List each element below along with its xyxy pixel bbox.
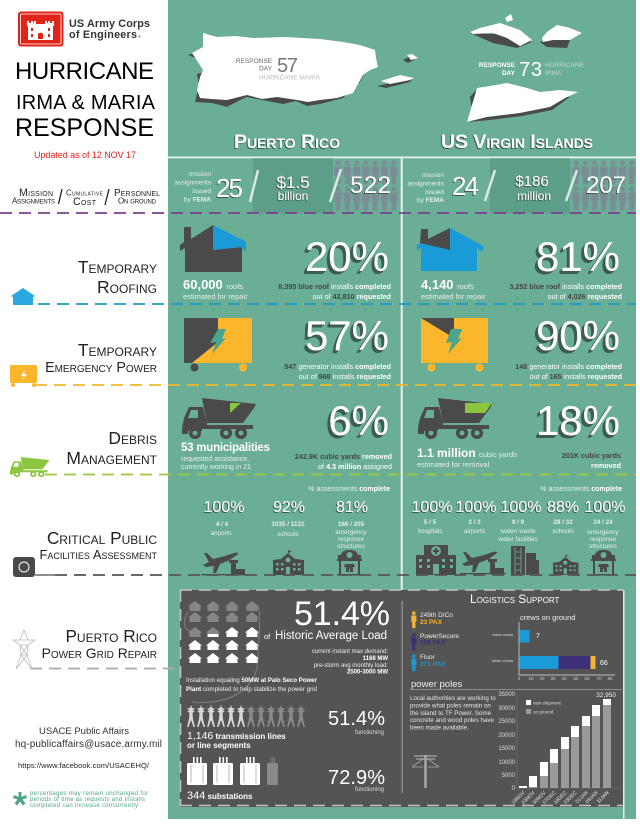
stats: Puerto Rico: $1.5 xyxy=(276,173,310,192)
stats: Puerto Rico: assignments xyxy=(174,180,212,186)
text: cubic yards estimated: 1.1 million cubic yards xyxy=(417,446,517,460)
bar chart: crews on ground: 30 xyxy=(550,676,556,681)
column headings: Assignments xyxy=(12,196,55,206)
stats: Puerto Rico xyxy=(174,169,391,204)
update date: Updated as of 12 NOV 17 xyxy=(34,150,136,160)
icon: debris truck, Puerto Rico xyxy=(182,398,256,437)
bar chart: power poles: 08JAN xyxy=(585,790,600,805)
footnote: completed can increase concurrently xyxy=(30,803,138,809)
legend: logistics personnel: Fluor xyxy=(420,654,436,661)
stats: US Virgin Islands: issued xyxy=(425,189,444,196)
bar chart: power poles: 0 xyxy=(512,786,516,792)
text: roof installs, Puerto Rico xyxy=(278,282,391,301)
response day label: RESPONSE xyxy=(479,62,516,69)
text: debris removed, Puerto Rico: of 4.3 million assigned xyxy=(318,462,392,471)
text: roof installs, Virgin Islands xyxy=(509,282,622,301)
stat: historic average load: 51.4% xyxy=(294,595,390,633)
text: transmission lines: 1,146 transmission lines xyxy=(187,730,286,742)
bar chart: power poles: on ground xyxy=(533,710,554,714)
stats: Puerto Rico: 25 xyxy=(216,173,243,203)
stats: US Virgin Islands: $186 xyxy=(515,173,549,190)
stat: 81 percent: 81% xyxy=(536,233,620,280)
text: debris removed, Virgin Islands xyxy=(562,451,621,470)
heading: power poles: power poles xyxy=(411,679,462,690)
column headings: Personnel xyxy=(114,188,160,199)
row: Debris Management: Debris xyxy=(108,428,157,448)
contact details: https://www.facebook.com/USACEHQ/ xyxy=(18,761,150,770)
bar chart: crews on ground: 70 xyxy=(596,676,602,681)
text: generator installs, Virgin Islands: out of 165 installs requested xyxy=(530,372,622,381)
legend: logistics personnel: PowerSecure xyxy=(420,633,459,640)
icon row: transmission towers xyxy=(187,705,305,727)
center divider xyxy=(401,158,403,590)
assessments: Puerto Rico: airports xyxy=(210,530,232,537)
assessments: Virgin Islands: % assessments complete xyxy=(540,486,622,493)
bar chart: crews on ground xyxy=(492,613,615,681)
text: roofs estimated, Puerto Rico: estimated for repair xyxy=(183,292,248,301)
assessments: Puerto Rico: emergency xyxy=(335,529,367,536)
legend: logistics personnel xyxy=(411,611,459,671)
assessments: Virgin Islands: response xyxy=(590,536,616,543)
assessments: Virgin Islands: 100% xyxy=(412,499,452,516)
assessments: Virgin Islands: 88% xyxy=(547,499,579,516)
heading: US Virgin Islands: US Virgin Islands xyxy=(441,131,593,153)
response day label: HURRICANE xyxy=(545,62,585,69)
dashed row separators xyxy=(0,213,636,668)
bar chart: power poles: 01JAN xyxy=(575,790,590,805)
bar chart: power poles: 23DEC xyxy=(563,790,579,806)
text: roofs estimated, Puerto Rico xyxy=(183,277,248,301)
stat: 57 percent: 57% xyxy=(305,312,389,359)
response day label xyxy=(479,59,585,81)
text: substations: 344 substations xyxy=(187,790,253,802)
response day label: DAY xyxy=(502,70,516,77)
map: Puerto Rico xyxy=(188,33,418,107)
bar chart: crews on ground: 7 xyxy=(536,633,540,640)
text: demand figures: pre-storm avg monthly load: xyxy=(314,663,388,669)
bar chart: power poles: 16DEC xyxy=(553,790,569,806)
text: municipalities xyxy=(181,442,270,471)
stat: 6 percent: 6% xyxy=(328,397,389,444)
text: Palo Seco installation xyxy=(186,677,318,693)
bar chart: power poles: 10000 xyxy=(498,760,516,766)
row: Temporary Roofing: Temporary xyxy=(78,257,157,277)
text: power poles explanation: the island to TF Power. Some xyxy=(410,710,492,717)
assessments: Puerto Rico: structures xyxy=(337,543,365,550)
stat: historic average load: of xyxy=(264,632,271,641)
bar chart: power poles: 23NOV xyxy=(521,790,537,806)
icon: house with partial blue roof, Puerto Rico xyxy=(180,225,246,272)
text: power poles explanation: been made available. xyxy=(410,724,469,732)
bar chart: crews on ground: crews on ground xyxy=(520,613,575,622)
text: cubic yards estimated: estimated for removal xyxy=(417,460,489,469)
assessments: Virgin Islands: 24 / 24 xyxy=(593,519,613,526)
text: transmission lines xyxy=(187,730,286,750)
bar chart: crews on ground: 80 xyxy=(607,676,613,681)
column headings: On ground xyxy=(118,196,157,206)
footnote: percentages may remain unchanged for xyxy=(30,791,148,797)
column headings xyxy=(12,187,160,208)
assessments: Puerto Rico: 166 / 205 xyxy=(338,521,365,528)
stats: Puerto Rico: billion xyxy=(278,189,308,203)
row: Temporary Emergency Power: Emergency Power xyxy=(45,360,157,376)
assessments: Virgin Islands: 100% xyxy=(585,499,625,516)
stat: 18 percent: 18% xyxy=(536,397,620,444)
panel: green background xyxy=(168,0,636,819)
row: Temporary Roofing: Roofing xyxy=(97,277,157,297)
footnote: periods of time as requests and installs xyxy=(30,797,145,803)
assessments: Puerto Rico: 1035 / 1131 xyxy=(272,521,305,528)
assessments: Puerto Rico: response xyxy=(338,536,364,543)
stats: US Virgin Islands: 24 xyxy=(452,171,479,201)
row: Debris Management xyxy=(10,397,621,476)
bar chart: crews on ground: 40 xyxy=(561,676,567,681)
icon: small generator xyxy=(10,365,37,387)
panel: header xyxy=(12,12,160,208)
text: debris removed, Puerto Rico xyxy=(295,452,392,471)
text: debris removed, Puerto Rico: 242.9K cubic yards removed xyxy=(295,452,392,461)
logo: US Army Corps of Engineers: of Engineers xyxy=(69,29,137,41)
icon: small green truck xyxy=(10,457,49,476)
logo: US Army Corps of Engineers xyxy=(18,12,150,46)
legend: logistics personnel: 258 PAX xyxy=(420,640,446,646)
response day label: 73 xyxy=(519,59,542,81)
row: Temporary Roofing xyxy=(11,225,622,305)
icon: debris truck, Virgin Islands xyxy=(418,398,492,437)
column headings: Mission xyxy=(19,187,53,199)
text: municipalities: 53 municipalities xyxy=(181,442,270,454)
bar chart: crews on ground: 50 xyxy=(573,676,579,681)
row: Temporary Emergency Power: Temporary xyxy=(78,340,157,360)
response day label: RESPONSE xyxy=(236,58,273,65)
assessments: Puerto Rico: 4 / 4 xyxy=(216,521,229,528)
text: generator installs, Puerto Rico: out of 968 installs requested xyxy=(299,372,391,381)
icon: house with mostly blue roof, Virgin Islands xyxy=(417,228,483,271)
assessments: Virgin Islands: 5 / 5 xyxy=(424,519,437,526)
response day label: HURRICANE MARIA xyxy=(259,74,321,82)
text: demand figures: 1168 MW xyxy=(363,656,388,662)
footnote xyxy=(13,791,148,809)
logo: US Army Corps of Engineers: US Army Corps xyxy=(69,18,150,30)
assessments: Virgin Islands: schools xyxy=(552,528,574,535)
bar chart: power poles: 07DEC xyxy=(542,790,558,806)
stat: 90 percent: 90% xyxy=(536,312,620,359)
text: roof installs, Puerto Rico: out of 42,810 requested xyxy=(313,292,391,301)
bar chart: crews on ground: trans crews xyxy=(493,632,513,637)
bar chart: power poles: 19NOV xyxy=(511,790,527,806)
bar chart: power poles: 20000 xyxy=(498,733,516,739)
text: power poles explanation xyxy=(410,695,496,732)
assessments: Puerto Rico: % assessments complete xyxy=(308,486,390,493)
text: demand figures xyxy=(312,649,388,676)
assessments: Virgin Islands: hospitals xyxy=(418,528,442,535)
icon: transmission tower xyxy=(13,630,35,669)
legend: logistics personnel: 249th D/Co xyxy=(420,612,453,619)
stats: Puerto Rico: 522 xyxy=(350,172,391,199)
bar chart: crews on ground: distro crews xyxy=(492,658,513,663)
text: debris removed, Virgin Islands: 201K cubic yards xyxy=(562,451,621,460)
row: Temporary Emergency Power xyxy=(10,312,622,387)
assessments: Puerto Rico: schools xyxy=(277,531,299,538)
contact details: USACE Public Affairs xyxy=(39,726,129,737)
stat: historic average load xyxy=(264,595,390,642)
bar chart: power poles: 35000 xyxy=(498,692,516,698)
bar chart: power poles: 32,950 xyxy=(596,692,616,699)
bar chart: power poles: 30NOV xyxy=(532,790,548,806)
text: municipalities: requested assistance, xyxy=(181,456,249,463)
panel: summary stats xyxy=(168,156,636,213)
icon: generator, Virgin Islands xyxy=(421,318,488,372)
bar chart: power poles: new shipment xyxy=(533,700,562,706)
response day label: DAY xyxy=(259,66,273,72)
bar chart: power poles: 5000 xyxy=(502,773,516,779)
assessments: Virgin Islands: structures xyxy=(589,543,617,550)
bar chart: crews on ground: 60 xyxy=(584,676,590,681)
response day label: 57 xyxy=(277,55,298,77)
text: generator installs, Puerto Rico xyxy=(284,362,391,381)
row: Critical Public Facilities Assessment xyxy=(13,486,625,577)
assessments: Virgin Islands: 100% xyxy=(501,499,541,516)
text: roofs estimated, Virgin Islands xyxy=(421,277,486,301)
assessments: Virgin Islands: water facilities xyxy=(497,536,538,543)
stat: substations functioning: functioning xyxy=(355,787,384,793)
text: generator installs, Virgin Islands: 148 generator installs completed xyxy=(515,362,622,371)
bar chart: crews on ground: 10 xyxy=(528,676,534,681)
icon: blue house xyxy=(11,288,35,305)
text: generator installs, Puerto Rico: 547 generator installs completed xyxy=(284,362,391,371)
heading: Puerto Rico: Puerto Rico xyxy=(234,131,340,153)
stat: historic average load: Historic Average Load xyxy=(275,630,387,642)
stats: US Virgin Islands: mission xyxy=(422,172,444,179)
response day label: IRMA xyxy=(545,70,562,77)
row: Debris Management: Management xyxy=(66,448,158,468)
text: Palo Seco installation: Installation equaling 50MW at Palo Seco Power xyxy=(186,677,318,684)
stats: Puerto Rico: issued xyxy=(192,188,211,195)
heading: logistics support: Logistics Support xyxy=(470,592,560,606)
title: IRMA & MARIA xyxy=(16,92,156,114)
text: demand figures: current instant max demand: xyxy=(312,649,388,655)
icon: generator, Puerto Rico xyxy=(184,318,252,372)
assessments: Puerto Rico: 100% xyxy=(204,499,244,516)
legend: logistics personnel: 271 PAX xyxy=(420,661,446,668)
column headings: Cumulative xyxy=(66,188,104,198)
row: Critical Public Facilities Assessment: Critical Public xyxy=(47,528,157,548)
stat: transmission functioning: 51.4% xyxy=(328,708,385,730)
contact details: hq-publicaffairs@usace.army.mil xyxy=(15,739,162,750)
row label: Puerto Rico Power Grid Repair xyxy=(42,626,157,661)
icon: power pole xyxy=(412,755,439,788)
response day label xyxy=(236,55,321,82)
bar chart: power poles: 25000 xyxy=(498,719,516,725)
stat: 20 percent: 20% xyxy=(305,233,389,280)
text: power poles explanation: concrete and wood poles have xyxy=(410,717,494,724)
title xyxy=(15,58,156,142)
bar chart: power poles: 15000 xyxy=(498,746,516,752)
bar chart: crews on ground: 66 xyxy=(600,660,608,667)
icon: tape measure xyxy=(13,557,55,577)
icon row: substations xyxy=(187,757,278,785)
stats: US Virgin Islands xyxy=(408,170,626,204)
map: US Virgin Islands xyxy=(467,14,585,122)
icons: Virgin Islands facilities xyxy=(416,545,616,576)
assessments: Virgin Islands xyxy=(412,486,625,550)
text: demand figures: 2500-3000 MW xyxy=(347,670,388,676)
text: roof installs, Virgin Islands: out of 4,026 requested xyxy=(548,292,622,301)
title: HURRICANE xyxy=(15,58,154,85)
text: generator installs, Virgin Islands xyxy=(515,362,622,381)
assessments: Virgin Islands: 100% xyxy=(456,499,496,516)
text: power poles explanation: Local authorities are working to xyxy=(410,695,496,702)
text: power poles explanation: provide what poles remain on xyxy=(410,702,491,710)
stats: US Virgin Islands: by FEMA xyxy=(417,197,444,204)
assessments: Virgin Islands: 28 / 32 xyxy=(553,519,573,526)
stats: Puerto Rico: by FEMA xyxy=(184,196,211,204)
text: roof installs, Virgin Islands: 3,252 blue roof installs completed xyxy=(509,282,622,291)
stats: Puerto Rico: mission xyxy=(189,171,211,178)
icons: Puerto Rico facilities xyxy=(201,547,362,576)
bar chart: crews on ground: 0 xyxy=(518,676,521,681)
text: municipalities: currently working in 21 xyxy=(181,464,251,471)
bar chart: power poles: 30000 xyxy=(498,706,516,712)
text: roofs estimated, Virgin Islands: estimated for repair xyxy=(421,292,486,301)
text: Palo Seco installation: Plant completed to help stabilize the power grid xyxy=(186,686,318,693)
bar chart: power poles: 11JAN xyxy=(596,790,611,805)
bar chart: crews on ground: 20 xyxy=(539,676,545,681)
assessments: Virgin Islands: 9 / 9 xyxy=(512,519,525,526)
contact details xyxy=(15,726,162,770)
panel: power grid repair xyxy=(180,590,624,819)
stat: substations functioning: 72.9% xyxy=(328,767,385,789)
assessments: Puerto Rico: 81% xyxy=(336,499,368,516)
row label: Puerto Rico Power Grid Repair: Puerto Rico xyxy=(65,626,157,646)
text: roofs estimated, Virgin Islands: 4,140 roofs xyxy=(421,277,474,292)
icon grid: homes with power xyxy=(184,601,260,702)
text: transmission lines: or line segments xyxy=(187,741,251,750)
assessments: Virgin Islands: 2 / 2 xyxy=(468,519,481,526)
stats: US Virgin Islands: 207 xyxy=(586,172,626,199)
stats: US Virgin Islands: million xyxy=(517,189,551,203)
row label: Puerto Rico Power Grid Repair: Power Grid Repair xyxy=(42,645,157,661)
assessments: Puerto Rico: 92% xyxy=(273,499,305,516)
column headings: Cost xyxy=(73,196,97,208)
text: debris removed, Virgin Islands: removed xyxy=(591,461,621,470)
text: roof installs, Puerto Rico: 8,395 blue roof installs completed xyxy=(278,282,391,291)
stat: transmission functioning: functioning xyxy=(355,730,384,736)
logo: US Army Corps of Engineers: ® xyxy=(138,34,141,39)
bar chart: power poles xyxy=(498,692,622,806)
assessments: Virgin Islands: water/ waste xyxy=(499,528,536,535)
assessments: Puerto Rico xyxy=(204,486,390,550)
text: cubic yards estimated xyxy=(417,446,517,469)
text: roofs estimated, Puerto Rico: 60,000 roofs xyxy=(183,277,243,292)
title: RESPONSE xyxy=(15,114,154,142)
legend: logistics personnel: 23 PAX xyxy=(420,619,443,626)
stats: US Virgin Islands: assignments xyxy=(408,180,445,188)
assessments: Virgin Islands: airports xyxy=(464,528,485,535)
row: Critical Public Facilities Assessment: Facilities Assessment xyxy=(39,547,158,562)
assessments: Virgin Islands: emergency xyxy=(587,529,619,536)
